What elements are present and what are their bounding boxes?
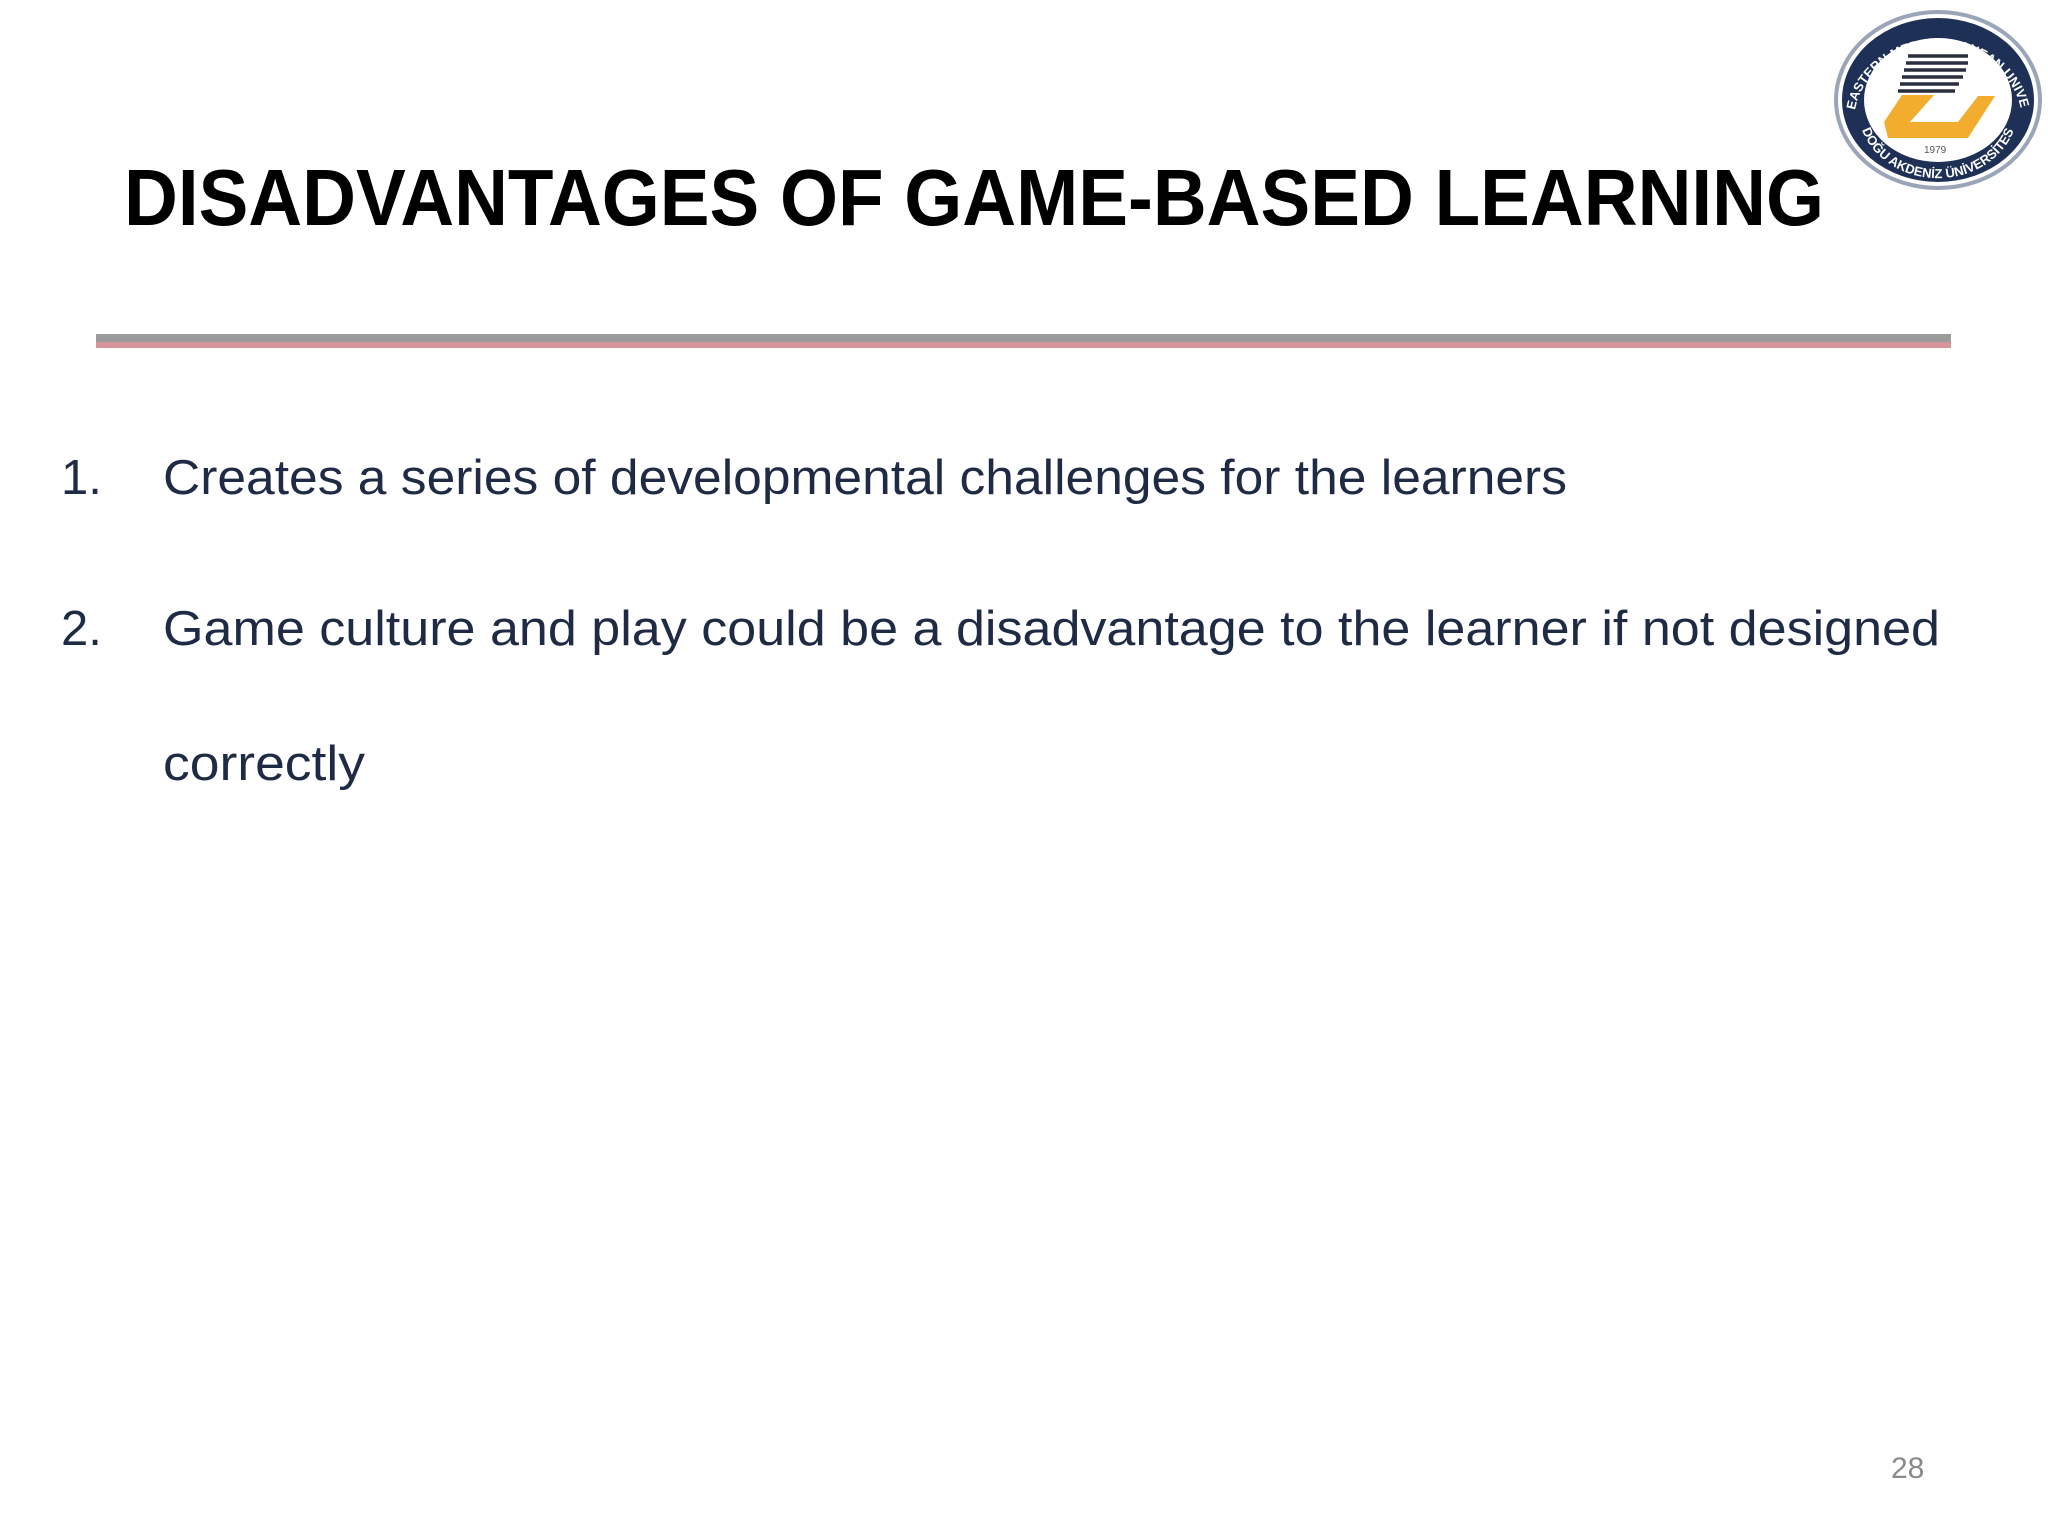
logo: university seal: 1979 — [1924, 145, 1947, 156]
list item 1: 1. — [61, 451, 102, 505]
list item 2: correctly — [163, 737, 366, 791]
logo: university seal — [1834, 10, 2042, 190]
divider line — [96, 334, 1951, 348]
title: DISADVANTAGES OF GAME-BASED LEARNING — [124, 153, 1824, 242]
list item 2: 2. — [61, 602, 102, 656]
list item 1: Creates a series of developmental challenges for the learners — [163, 451, 1567, 505]
list item 2: Game culture and play could be a disadvantage to the learner if not designed — [163, 602, 1940, 656]
page number: 28 — [1891, 1452, 1924, 1485]
list item 2 — [61, 602, 1940, 791]
